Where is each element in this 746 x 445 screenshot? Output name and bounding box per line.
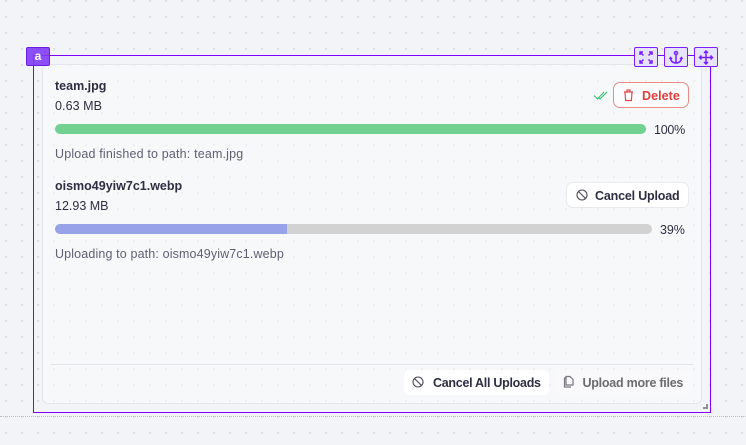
panel: file list	[42, 64, 702, 404]
delete label: Delete	[642, 89, 680, 103]
cancel upload button	[566, 182, 689, 208]
icon: double check	[594, 92, 608, 100]
upload more files button	[554, 370, 693, 395]
cancel all label: Cancel All Uploads	[433, 376, 541, 390]
footer divider	[50, 364, 694, 365]
cancel upload label: Cancel Upload	[595, 189, 679, 203]
icon: move	[694, 47, 718, 67]
file 1 name: team.jpg	[55, 79, 106, 93]
selection frame	[33, 55, 711, 413]
delete button	[613, 82, 689, 108]
badge: a	[26, 47, 50, 66]
file 2 name: oismo49yiw7c1.webp	[55, 179, 182, 193]
progress track 1	[55, 124, 646, 134]
file 1 status: Upload finished to path: team.jpg	[55, 147, 243, 161]
file 2 status: Uploading to path: oismo49yiw7c1.webp	[55, 247, 284, 261]
dotted guide line	[0, 416, 746, 417]
icon: cancel	[576, 190, 588, 200]
badge: a: a	[35, 49, 41, 63]
progress bar 2	[55, 224, 652, 234]
progress label 2: 39%	[660, 223, 685, 237]
icon: anchor	[664, 47, 688, 67]
progress fill 2	[55, 224, 287, 234]
progress label 1: 100%	[654, 123, 685, 137]
icon: files	[564, 376, 574, 388]
icon: cancel	[412, 376, 424, 388]
upload more label: Upload more files	[582, 376, 683, 390]
file 1 size: 0.63 MB	[55, 99, 102, 113]
file 2 size: 12.93 MB	[55, 199, 109, 213]
resize handle	[703, 404, 708, 409]
cancel all uploads button	[404, 370, 549, 395]
icon: trash	[624, 89, 633, 102]
icon: expand	[634, 47, 658, 67]
